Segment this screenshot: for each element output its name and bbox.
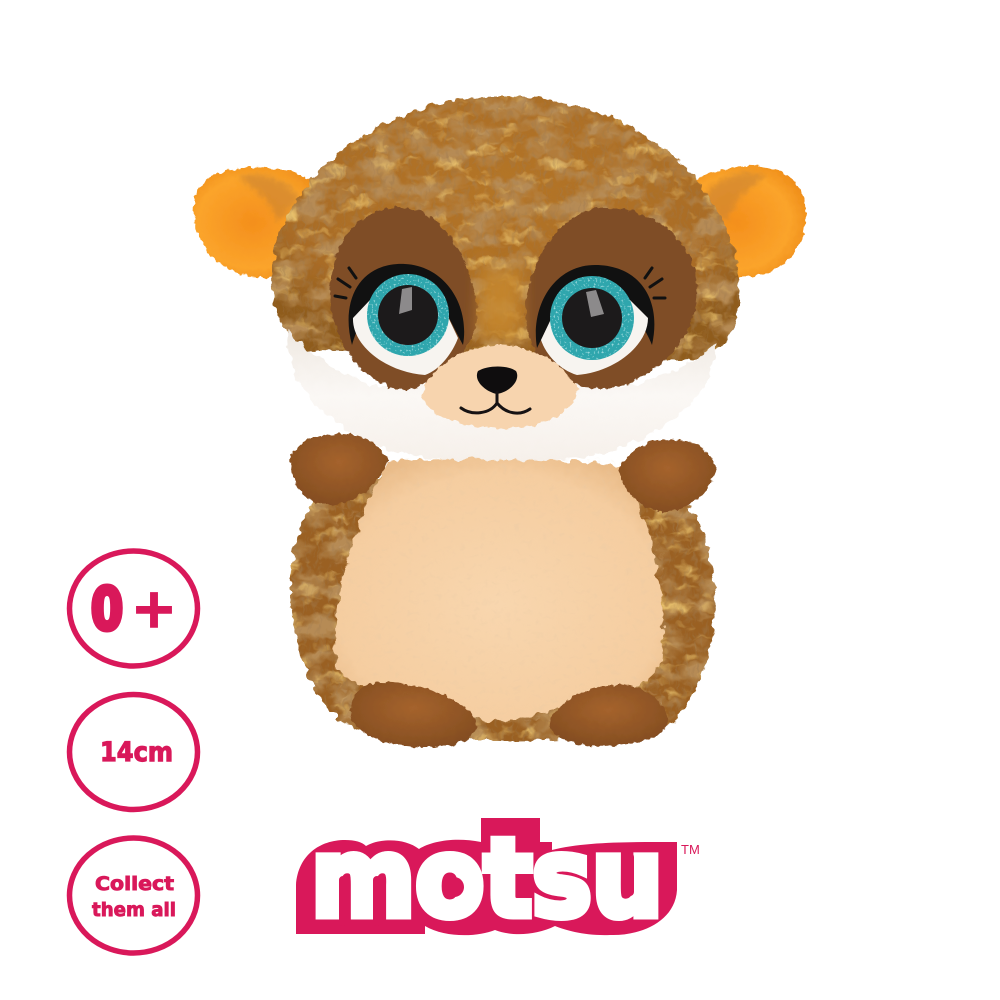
logo: motsu: motsu <box>311 816 663 942</box>
left arm <box>291 433 388 505</box>
left eye <box>349 264 464 375</box>
badge: size 14cm: 14cm <box>100 737 173 768</box>
plush toy <box>194 90 806 750</box>
badge: collect them all: Collect <box>95 873 174 895</box>
badge: age 0+ <box>70 551 198 666</box>
head fur <box>260 90 750 370</box>
muzzle <box>422 345 578 429</box>
badge: age 0+: 0 <box>91 575 123 643</box>
logo details <box>343 880 377 922</box>
left ear <box>194 167 325 277</box>
trademark: TM <box>681 842 700 857</box>
back fur behind body <box>289 476 717 742</box>
mouth <box>461 392 530 413</box>
left eye patch <box>330 207 476 390</box>
logo backing <box>296 818 677 935</box>
left foot <box>350 682 476 748</box>
right foot <box>550 685 668 746</box>
nose <box>477 366 517 394</box>
product infographic <box>66 95 807 956</box>
eyelashes <box>335 268 665 298</box>
body belly <box>335 459 663 721</box>
badge: size 14cm <box>70 694 198 810</box>
badge: age 0+: + <box>131 577 177 640</box>
right eye patch <box>525 208 697 388</box>
forehead golden stripe <box>478 250 522 340</box>
badge: collect them all: them all <box>92 899 176 921</box>
right arm <box>619 439 716 512</box>
white cheeks <box>288 330 715 462</box>
right ear <box>680 166 806 278</box>
badge: collect them all <box>70 838 198 953</box>
right eye <box>536 265 654 375</box>
